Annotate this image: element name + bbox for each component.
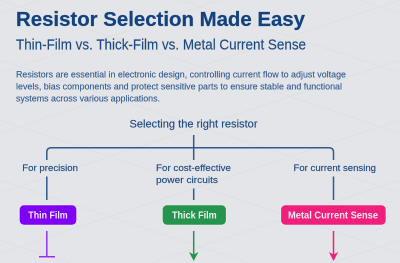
- branch label: cost-effective: [156, 163, 231, 186]
- branch label: current sensing: For current sensing: [294, 163, 376, 174]
- branch label: precision: For precision: [22, 163, 78, 174]
- intro text: [16, 70, 346, 104]
- button: Thin Film: [19, 205, 77, 225]
- flowchart heading: Selecting the right resistor: [130, 118, 258, 130]
- intro text: levels, bias components and protect sensitive parts to ensure stable and functional: [16, 82, 342, 92]
- button: Thick Film: Thick Film: [172, 211, 217, 222]
- title: Resistor Selection Made Easy: [16, 8, 306, 31]
- flowchart connectors: [47, 135, 334, 200]
- arrow: Thick Film: [189, 231, 198, 261]
- button: Metal Current Sense: Metal Current Sense: [288, 211, 378, 222]
- branch label: cost-effective: power circuits: [156, 175, 218, 186]
- button: Thin Film: Thin Film: [28, 211, 68, 222]
- arrow: Metal Current Sense: [329, 231, 338, 261]
- connector: Thin Film t-bar: [39, 231, 55, 257]
- intro text: Resistors are essential in electronic design, controlling current flow to adjust voltage: [16, 70, 346, 80]
- subtitle: Thin-Film vs. Thick-Film vs. Metal Current Sense: [16, 38, 306, 54]
- button: Metal Current Sense: [281, 205, 386, 225]
- intro text: systems across various applications.: [16, 94, 160, 104]
- button: Thick Film: [162, 205, 226, 225]
- branch label: cost-effective: For cost-effective: [156, 163, 231, 174]
